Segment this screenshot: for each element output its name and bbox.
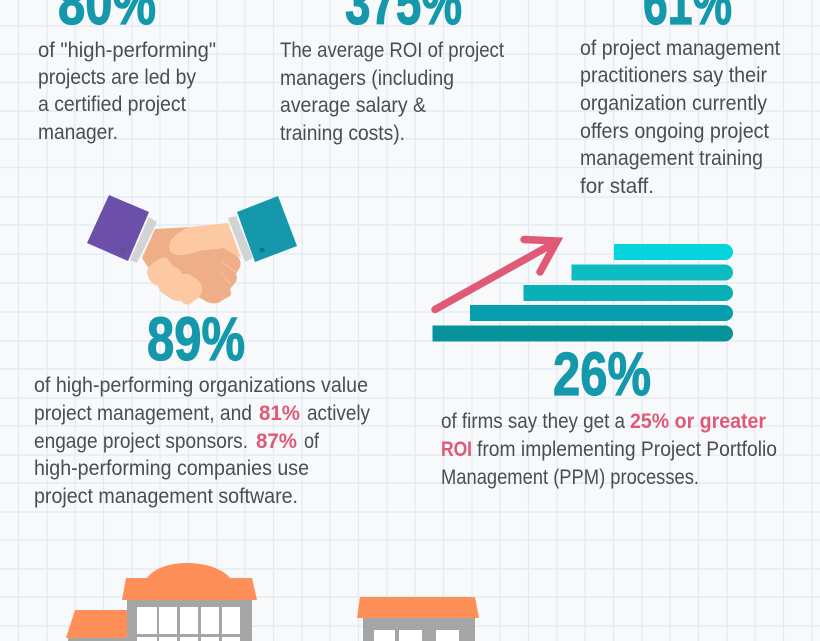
dome roof: [122, 563, 257, 600]
windows: [374, 630, 459, 641]
text: high-performing organizations: project management, and: [34, 401, 252, 425]
text: certified project manager: projects are led by: [38, 65, 196, 89]
text: average ROI: training costs).: [280, 121, 405, 145]
text: certified project manager: manager.: [38, 120, 118, 144]
text: high-performing organizations: 87%: [256, 429, 297, 453]
text: high-performing organizations: of: [304, 429, 319, 453]
text: PPM ROI: Management (PPM) processes.: [441, 465, 699, 489]
text: PPM ROI: of firms say they get a: [441, 409, 625, 433]
bar 4: [572, 264, 733, 280]
arrow: [435, 240, 557, 310]
bar 3: [524, 285, 733, 301]
text: ongoing training: management training: [580, 146, 763, 170]
text: ongoing training: [580, 36, 780, 198]
side roof: [66, 610, 127, 638]
text: high-performing organizations: engage project sponsors.: [34, 429, 248, 453]
text: ongoing training: organization currently: [580, 91, 767, 115]
windows: [137, 607, 240, 641]
text: high-performing organizations: high-performing companies use: [34, 456, 309, 480]
text: ongoing training: practitioners say their: [580, 63, 767, 87]
text: PPM ROI: 25% or greater: [630, 409, 767, 433]
wall: [363, 618, 475, 641]
text: certified project manager: of "high-performing": [38, 38, 216, 62]
text: PPM ROI: from implementing Project Portfolio: [477, 437, 777, 461]
text: average ROI: [280, 38, 504, 145]
text: PPM ROI: ROI: [441, 437, 472, 461]
bar 2: [470, 305, 733, 321]
text: certified project manager: a certified project: [38, 92, 186, 116]
text: ongoing training: offers ongoing project: [580, 119, 769, 143]
text: average ROI: average salary &: [280, 93, 426, 117]
stat: 26%: 26%: [553, 340, 651, 408]
text: high-performing organizations: project management software.: [34, 484, 298, 508]
text: high-performing organizations: of high-performing organizations value: [34, 373, 368, 397]
stat: 89%: 89%: [147, 305, 245, 373]
text: certified project manager: [38, 38, 216, 144]
icon: handshake: [87, 195, 297, 305]
text: ongoing training: for staff.: [580, 174, 654, 198]
icon: small building: [357, 597, 479, 641]
bar 1: [432, 326, 733, 342]
text: average ROI: managers (including: [280, 66, 454, 90]
icon: large building with dome: [66, 563, 257, 641]
chart: rising bars with arrow: [432, 240, 733, 342]
main wall: [127, 600, 252, 641]
bar 5: [614, 244, 733, 260]
text: high-performing organizations: [34, 373, 370, 508]
roof: [357, 597, 479, 618]
side wall: [68, 638, 128, 641]
text: average ROI: The average ROI of project: [280, 38, 504, 62]
text: high-performing organizations: actively: [307, 401, 370, 425]
text: PPM ROI: [441, 409, 777, 489]
text: ongoing training: of project management: [580, 36, 780, 60]
text: high-performing organizations: 81%: [259, 401, 300, 425]
